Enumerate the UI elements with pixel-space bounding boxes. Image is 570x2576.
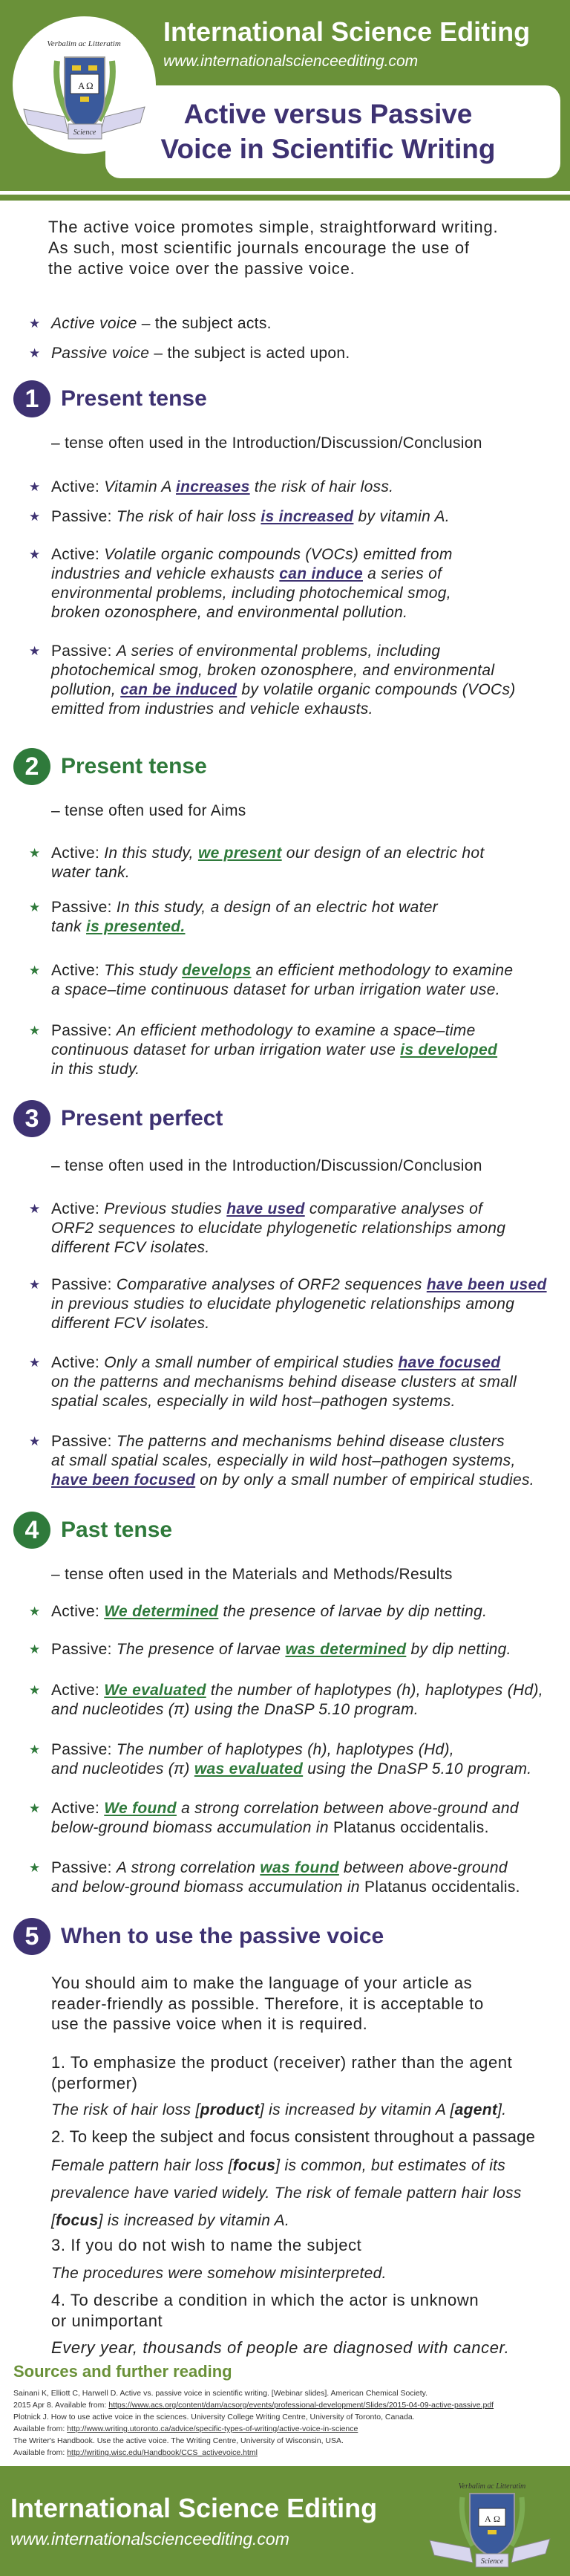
section 4: – tense often used in the Materials and Methods/Results: [51, 1566, 453, 1583]
icon: number 1: 1: [25, 385, 39, 413]
section 4: ★: [29, 1683, 41, 1697]
section 1: industries and vehicle exhausts can induce a series of: [51, 565, 442, 582]
section 5: or unimportant: [51, 2312, 163, 2330]
section 3: in previous studies to elucidate phylogenetic relationships among: [51, 1295, 514, 1313]
section 5: 1. To emphasize the product (receiver) rather than the agent: [51, 2053, 512, 2072]
section 4: and nucleotides (π) was evaluated using the DnaSP 5.10 program.: [51, 1760, 531, 1777]
section 2: Active: This study develops an efficient methodology to examine: [51, 962, 513, 979]
icon: number 4: [13, 1512, 50, 1549]
section 3: ORF2 sequences to elucidate phylogenetic relationships among: [51, 1220, 505, 1237]
section 1: ★: [29, 547, 41, 562]
section 4: [13, 1512, 543, 1896]
section 4: below-ground biomass accumulation in Platanus occidentalis.: [51, 1819, 489, 1836]
intro text: the active voice over the passive voice.: [48, 259, 356, 278]
section 4: Passive: A strong correlation was found between above-ground: [51, 1859, 508, 1876]
sources heading: Sources and further reading: [13, 2362, 232, 2381]
section 5: reader-friendly as possible. Therefore, it is acceptable to: [51, 1994, 484, 2013]
definitions: ★: [29, 346, 41, 360]
icon: number 2: 2: [25, 752, 39, 781]
section 1: environmental problems, including photochemical smog,: [51, 585, 451, 602]
section 1: broken ozonosphere, and environmental pollution.: [51, 604, 407, 621]
definitions: ★: [29, 316, 41, 331]
intro text: The active voice promotes simple, straightforward writing.: [48, 218, 498, 236]
footer title: International Science Editing: [10, 2493, 377, 2523]
section 4: Passive: The presence of larvae was determined by dip netting.: [51, 1641, 511, 1658]
section 5: Every year, thousands of people are diagnosed with cancer.: [51, 2338, 509, 2357]
section 1: emitted from industries and vehicle exhausts.: [51, 700, 373, 718]
section 5: The procedures were somehow misinterpreted.: [51, 2265, 387, 2282]
title card: [105, 85, 560, 178]
section 2: in this study.: [51, 1061, 140, 1078]
section 3: different FCV isolates.: [51, 1315, 209, 1332]
heading 4: Past tense: [61, 1518, 172, 1542]
references: 2015 Apr 8. Available from: https://www.acs.org/content/dam/acsorg/events/professional-development/Slides/2015-04-09-active-passive.pdf: [13, 2401, 494, 2410]
section 2: Passive: In this study, a design of an electric hot water: [51, 899, 438, 916]
section 2: ★: [29, 963, 41, 978]
references: [13, 2389, 494, 2457]
footer logo: [429, 2482, 551, 2567]
section 5: 3. If you do not wish to name the subject: [51, 2236, 361, 2254]
section 3: Active: Only a small number of empirical studies have focused: [51, 1354, 500, 1371]
section 2: water tank.: [51, 864, 130, 881]
section 4: ★: [29, 1642, 41, 1656]
references: The Writer's Handbook. Use the active voice. The Writing Centre, University of Wisconsin, USA.: [13, 2436, 344, 2445]
section 4: and nucleotides (π) using the DnaSP 5.10 program.: [51, 1701, 419, 1718]
section 3: at small spatial scales, especially in wild host–pathogen systems,: [51, 1452, 516, 1469]
section 4: ★: [29, 1743, 41, 1757]
icon: number 5: 5: [25, 1922, 39, 1951]
section 3: different FCV isolates.: [51, 1239, 209, 1256]
logo: Science: [73, 129, 96, 137]
intro text: [48, 218, 498, 278]
section 4: ★: [29, 1861, 41, 1875]
section 5: You should aim to make the language of your article as: [51, 1974, 472, 1992]
definitions: Passive voice – the subject is acted upon.: [51, 345, 350, 362]
header title: International Science Editing: [163, 16, 530, 47]
section 4: Active: We evaluated the number of haplotypes (h), haplotypes (Hd),: [51, 1682, 543, 1699]
icon: number 3: 3: [25, 1105, 39, 1133]
section 1: photochemical smog, broken ozonosphere, and environmental: [51, 662, 494, 679]
definitions: Active voice – the subject acts.: [51, 315, 272, 332]
header url: www.internationalscienceediting.com: [163, 53, 418, 70]
definitions: [29, 315, 350, 362]
header: [0, 0, 570, 201]
section 2: Passive: An efficient methodology to examine a space–time: [51, 1022, 476, 1039]
section 4: Active: We determined the presence of larvae by dip netting.: [51, 1603, 487, 1620]
section 3: [13, 1100, 547, 1489]
section 2: continuous dataset for urban irrigation water use is developed: [51, 1041, 497, 1058]
title card: Active versus Passive: [184, 99, 472, 129]
section 2: ★: [29, 1024, 41, 1038]
references: Plotnick J. How to use active voice in the sciences. University College Writing Centre, University of Toronto, Canada.: [13, 2413, 415, 2421]
icon: number 3: [13, 1100, 50, 1137]
section 3: – tense often used in the Introduction/Discussion/Conclusion: [51, 1157, 482, 1174]
section 2: ★: [29, 900, 41, 914]
footer logo: A: [485, 2514, 491, 2524]
section 5: (performer): [51, 2074, 138, 2092]
section 1: ★: [29, 644, 41, 658]
heading 1: Present tense: [61, 386, 207, 411]
section 3: ★: [29, 1202, 41, 1216]
section 5: Female pattern hair loss [focus] is common, but estimates of its: [51, 2157, 505, 2174]
icon: number 2: [13, 748, 50, 785]
section 4: Passive: The number of haplotypes (h), haplotypes (Hd),: [51, 1741, 454, 1758]
footer url: www.internationalscienceediting.com: [10, 2529, 289, 2549]
references: Sainani K, Elliott C, Harwell D. Active vs. passive voice in scientific writing. [Webinar slides]. American Chemical Society.: [13, 2389, 428, 2398]
section 5: use the passive voice when it is required.: [51, 2014, 367, 2033]
section 3: spatial scales, especially in wild host–pathogen systems.: [51, 1393, 456, 1410]
section 1: pollution, can be induced by volatile organic compounds (VOCs): [51, 681, 516, 698]
section 1: Active: Volatile organic compounds (VOCs) emitted from: [51, 546, 453, 563]
section 1: Passive: A series of environmental problems, including: [51, 643, 440, 660]
section 3: Passive: The patterns and mechanisms behind disease clusters: [51, 1433, 505, 1450]
section 5: The risk of hair loss [product] is increased by vitamin A [agent].: [51, 2101, 506, 2118]
section 5: [focus] is increased by vitamin A.: [51, 2212, 289, 2229]
section 5: [13, 1918, 535, 2357]
title card: Voice in Scientific Writing: [161, 134, 495, 164]
section 4: ★: [29, 1604, 41, 1619]
footer logo: Ω: [494, 2514, 500, 2524]
references: Available from: http://writing.wisc.edu/Handbook/CCS_activevoice.html: [13, 2448, 258, 2457]
section 2: – tense often used for Aims: [51, 802, 246, 819]
section 5: prevalence have varied widely. The risk of female pattern hair loss: [51, 2185, 522, 2202]
icon: number 4: 4: [25, 1516, 39, 1544]
icon: number 1: [13, 380, 50, 417]
heading 5: When to use the passive voice: [61, 1924, 384, 1948]
footer: [0, 2466, 570, 2576]
section 3: ★: [29, 1434, 41, 1448]
references: Available from: http://www.writing.utoronto.ca/advice/specific-types-of-writing/active-voice-in-science: [13, 2424, 358, 2433]
section 1: ★: [29, 480, 41, 494]
section 2: Active: In this study, we present our design of an electric hot: [51, 845, 484, 862]
footer logo: Verbalim ac Litteratim: [459, 2482, 525, 2491]
section 5: 2. To keep the subject and focus consistent throughout a passage: [51, 2127, 535, 2146]
section 5: 4. To describe a condition in which the actor is unknown: [51, 2291, 479, 2309]
section 3: on the patterns and mechanisms behind disease clusters at small: [51, 1373, 517, 1391]
section 3: have been focused on by only a small number of empirical studies.: [51, 1471, 534, 1489]
section 2: ★: [29, 846, 41, 860]
section 1: Passive: The risk of hair loss is increased by vitamin A.: [51, 508, 450, 525]
section 2: tank is presented.: [51, 918, 185, 935]
section 1: – tense often used in the Introduction/Discussion/Conclusion: [51, 435, 482, 452]
section 4: and below-ground biomass accumulation in Platanus occidentalis.: [51, 1879, 520, 1896]
section 3: Active: Previous studies have used comparative analyses of: [51, 1200, 482, 1217]
section 2: [13, 748, 513, 1078]
footer logo: Science: [481, 2557, 504, 2566]
icon: number 5: [13, 1918, 50, 1955]
section 1: [13, 380, 516, 718]
section 1: Active: Vitamin A increases the risk of hair loss.: [51, 478, 393, 495]
logo: Ω: [86, 80, 94, 91]
heading 2: Present tense: [61, 754, 207, 778]
section 3: ★: [29, 1278, 41, 1292]
section 3: Passive: Comparative analyses of ORF2 sequences have been used: [51, 1276, 547, 1293]
intro text: As such, most scientific journals encourage the use of: [48, 238, 470, 257]
section 3: ★: [29, 1356, 41, 1370]
section 4: Active: We found a strong correlation between above-ground and: [51, 1800, 519, 1817]
section 4: ★: [29, 1801, 41, 1815]
section 1: ★: [29, 510, 41, 524]
heading 3: Present perfect: [61, 1106, 223, 1131]
logo: A: [78, 80, 85, 91]
section 2: a space–time continuous dataset for urban irrigation water use.: [51, 981, 500, 998]
logo: Verbalim ac Litteratim: [47, 39, 121, 48]
logo: [13, 16, 156, 154]
